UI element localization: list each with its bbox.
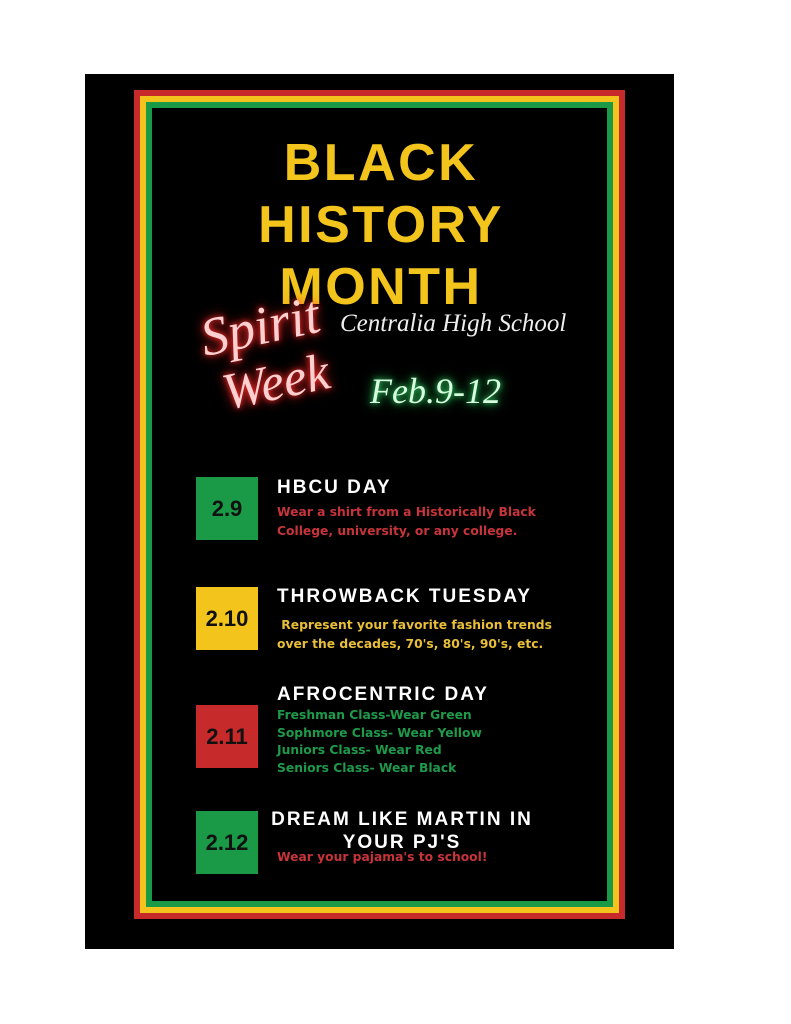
item 2.12 <box>196 809 533 874</box>
title <box>258 134 504 316</box>
item 2.11: AFROCENTRIC DAY <box>277 684 489 705</box>
item 2.12: 2.12 <box>206 830 248 854</box>
script: Spirit Week: Spirit <box>195 284 325 368</box>
item 2.11: Seniors Class- Wear Black <box>277 760 456 774</box>
title: BLACK <box>284 134 478 192</box>
script: Centralia High School: Centralia High School <box>340 310 566 337</box>
title: HISTORY <box>258 196 504 254</box>
item 2.12: YOUR PJ'S <box>343 832 461 853</box>
item 2.12: Wear your pajama's to school! <box>277 850 487 864</box>
title: MONTH <box>279 258 483 316</box>
item 2.10: Represent your favorite fashion trends <box>281 618 552 632</box>
item 2.12: DREAM LIKE MARTIN IN <box>271 809 533 830</box>
item 2.11 <box>196 684 489 774</box>
item 2.10: THROWBACK TUESDAY <box>277 586 532 607</box>
item 2.9: 2.9 <box>212 496 242 520</box>
item 2.11: 2.11 <box>206 724 248 748</box>
item 2.11: Juniors Class- Wear Red <box>277 743 442 757</box>
item 2.10: over the decades, 70's, 80's, 90's, etc. <box>277 637 543 651</box>
item 2.10: 2.10 <box>206 606 248 630</box>
item 2.9: HBCU DAY <box>277 477 392 498</box>
item 2.10 <box>196 586 552 651</box>
item 2.11: Sophmore Class- Wear Yellow <box>277 726 482 740</box>
item 2.9 <box>196 477 536 540</box>
item 2.9: Wear a shirt from a Historically Black <box>277 505 536 519</box>
item 2.9: College, university, or any college. <box>277 524 517 538</box>
script: date: Feb.9-12 <box>370 371 501 411</box>
tricolor border <box>134 90 625 919</box>
script: Spirit Week <box>195 284 337 422</box>
item 2.11: Freshman Class-Wear Green <box>277 708 472 722</box>
black poster panel <box>85 74 674 949</box>
script: Spirit Week: Week <box>217 343 335 422</box>
